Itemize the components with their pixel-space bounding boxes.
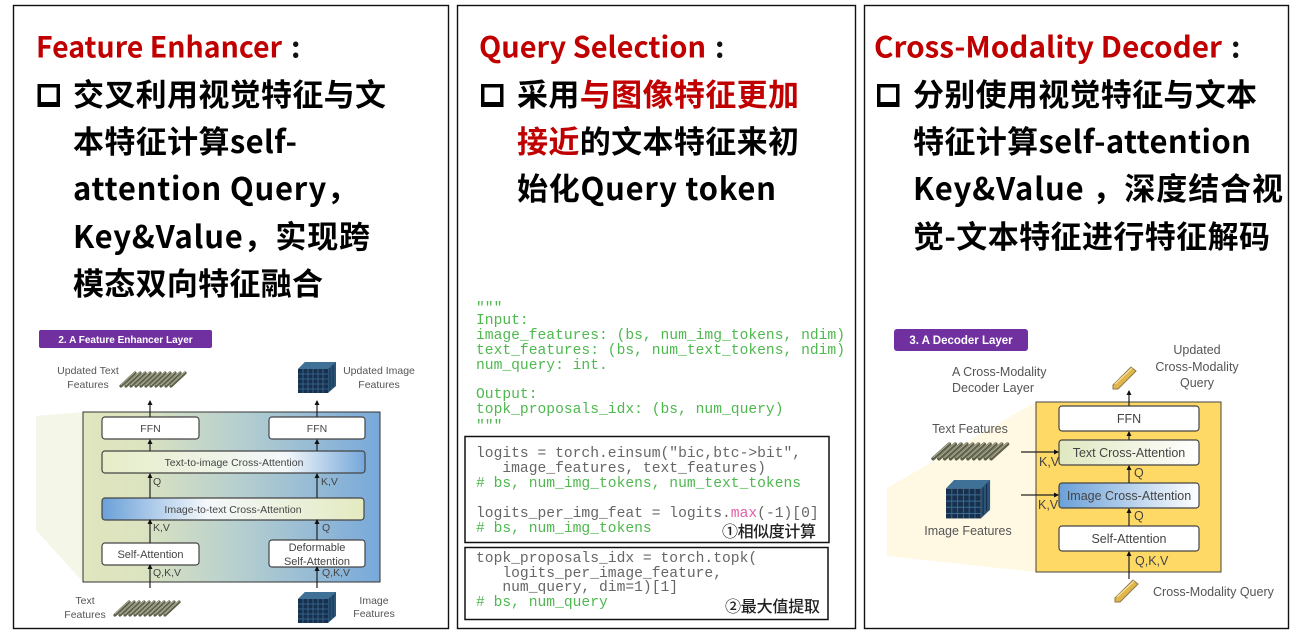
panel: Cross-Modality Decoder xyxy=(864,6,1288,628)
block: self-attention xyxy=(102,543,199,565)
text block: Query Selection description: 接近的文本特征来初 xyxy=(517,117,799,162)
heading: Query Selection: : xyxy=(715,24,724,66)
block: deformable self-attention: Deformable xyxy=(289,542,345,554)
block: text cross-attention xyxy=(1059,440,1199,465)
code box: similarity computation xyxy=(465,436,829,542)
label: updated image features xyxy=(343,365,415,391)
label: text features: Text Features xyxy=(932,422,1008,436)
code: input and output docstring: """ xyxy=(476,419,502,435)
label: cross-modality query: Cross-Modality Query xyxy=(1153,585,1275,599)
icon: image features xyxy=(298,592,336,623)
block: text-to-image cross-attention: Text-to-image Cross-Attention xyxy=(165,457,304,469)
code box: similarity computation: logits = torch.einsum("bic,btc->bit", xyxy=(476,446,801,462)
block: text cross-attention: Text Cross-Attention xyxy=(1073,446,1185,460)
label: updated text features: Updated Text xyxy=(57,365,119,377)
icon: checkbox bullet xyxy=(38,84,60,107)
block: image cross-attention: Image Cross-Attention xyxy=(1067,489,1191,503)
icon: checkbox bullet xyxy=(877,84,900,107)
label: image features: Features xyxy=(353,608,395,620)
icon: input query xyxy=(1115,580,1138,602)
labels: Q K V xyxy=(1038,455,1169,568)
arrows: vertical flow xyxy=(1128,391,1130,579)
arrows: right column xyxy=(316,401,318,588)
code: input and output docstring: num_query: int. xyxy=(476,358,608,374)
text block: Feature Enhancer description: 模态双向特征融合 xyxy=(73,259,323,304)
block: FFN xyxy=(1059,406,1199,431)
layer background xyxy=(1036,402,1221,572)
labels: Q K V: K,V xyxy=(321,476,338,488)
label: text features: Features xyxy=(64,609,106,621)
icon: updated query xyxy=(1113,367,1136,389)
block: self-attention xyxy=(1059,526,1199,551)
arrows: left column xyxy=(149,401,151,588)
diagram: Feature Enhancer Layer xyxy=(36,330,415,623)
labels: Q K V: K,V xyxy=(153,522,170,534)
text block: Query Selection description: 采用与图像特征更加 xyxy=(517,70,799,115)
labels: Q K V xyxy=(153,476,350,579)
block: right FFN: FFN xyxy=(307,423,327,435)
code box: similarity computation: image_features, text_features) xyxy=(476,461,766,477)
code: input and output docstring: image_features: (bs, num_img_tokens, ndim) xyxy=(476,328,845,344)
diagram: Decoder Layer xyxy=(887,329,1275,602)
labels: Q K V: Q xyxy=(1134,466,1144,480)
labels: Q K V: Q xyxy=(1134,509,1144,523)
label: updated cross-modality query: Updated xyxy=(1173,343,1221,357)
label: image features: Image xyxy=(359,595,389,607)
code: input and output docstring: Output: xyxy=(476,387,538,403)
text block: Cross-Modality Decoder description: 觉-文本特征进行特征解码 xyxy=(913,212,1270,257)
text block: Cross-Modality Decoder description: 特征计算self-attention xyxy=(913,117,1251,162)
icon: image features xyxy=(946,480,990,518)
label: text features: Text xyxy=(75,595,95,607)
labels: Q K V: K,V xyxy=(1038,498,1059,512)
icon: text features xyxy=(115,601,179,615)
layer background xyxy=(83,412,380,582)
label: similarity computation: ①相似度计算 xyxy=(722,518,816,542)
text block: Query Selection description xyxy=(517,70,799,209)
text block: Feature Enhancer description: attention Query， xyxy=(73,164,358,209)
code box: similarity computation: logits_per_img_feat = logits.max(-1)[0] xyxy=(476,506,819,522)
code: input and output docstring: """ xyxy=(476,301,502,317)
code box: max value extraction: topk_proposals_idx = torch.topk( xyxy=(476,551,757,567)
block: right FFN xyxy=(269,417,365,439)
code box: max value extraction xyxy=(465,548,828,620)
text block: Cross-Modality Decoder description: Key&Value ，深度结合视 xyxy=(913,164,1283,209)
text block: Feature Enhancer description: 交叉利用视觉特征与文 xyxy=(73,70,386,115)
heading: Query Selection: Query Selection xyxy=(479,24,706,66)
text block: Feature Enhancer description xyxy=(73,70,386,304)
block: self-attention: Self-Attention xyxy=(1091,532,1167,546)
label: cross-modality decoder layer: Decoder Layer xyxy=(952,381,1034,395)
label: updated cross-modality query: Cross-Modality xyxy=(1155,360,1239,374)
text block: Query Selection description: 始化Query token xyxy=(517,164,776,209)
icon: updated image features xyxy=(298,362,336,393)
labels: Q K V: Q,K,V xyxy=(1135,554,1169,568)
icon: updated text features xyxy=(121,372,185,386)
block: image cross-attention xyxy=(1059,483,1199,508)
label: updated text features: Features xyxy=(67,379,109,391)
block: left FFN xyxy=(102,417,199,439)
text block: Feature Enhancer description: Key&Value，实现跨 xyxy=(73,212,370,257)
label: image features: Image Features xyxy=(924,524,1012,538)
block: FFN: FFN xyxy=(1117,412,1141,426)
arrows: feature inputs xyxy=(1021,452,1058,495)
labels: Q K V: Q,K,V xyxy=(322,567,350,579)
zoom trapezoid xyxy=(36,412,83,582)
block: left FFN: FFN xyxy=(140,423,161,435)
labels: Q K V: Q xyxy=(153,476,161,488)
code box: max value extraction: num_query, dim=1)[1] xyxy=(476,580,678,596)
text block: Cross-Modality Decoder description: 分别使用视觉特征与文本 xyxy=(913,70,1257,115)
text block: Cross-Modality Decoder description xyxy=(913,70,1283,257)
heading: Feature Enhancer: Feature Enhancer xyxy=(36,24,282,66)
heading: Cross-Modality Decoder: : xyxy=(1231,24,1240,66)
block: deformable self-attention: Self-Attention xyxy=(284,556,350,568)
label: cross-modality decoder layer: A Cross-Modality xyxy=(952,365,1047,379)
labels: Q K V: Q xyxy=(322,522,330,534)
panel: Feature Enhancer xyxy=(14,6,448,628)
label: cross-modality decoder layer xyxy=(952,365,1047,395)
label: updated image features: Features xyxy=(358,379,400,391)
block: self-attention: Self-Attention xyxy=(117,549,184,561)
label: image features xyxy=(353,595,395,620)
icon: checkbox bullet xyxy=(481,84,504,107)
labels: Q K V: Q,K,V xyxy=(153,567,181,579)
label: layer title: 3. A Decoder Layer xyxy=(909,335,1013,347)
heading: Cross-Modality Decoder: Cross-Modality Decoder xyxy=(874,24,1222,66)
label: updated cross-modality query xyxy=(1155,343,1239,390)
panel: Query Selection xyxy=(458,6,856,628)
code: input and output docstring: topk_proposals_idx: (bs, num_query) xyxy=(476,402,784,418)
label: layer title xyxy=(894,329,1028,351)
label: layer title: 2. A Feature Enhancer Layer xyxy=(58,335,193,346)
block: image-to-text cross-attention: Image-to-text Cross-Attention xyxy=(164,504,302,516)
label: updated text features xyxy=(57,365,119,391)
code: input and output docstring: text_features: (bs, num_text_tokens, ndim) xyxy=(476,343,845,359)
block: text-to-image cross-attention xyxy=(102,451,365,473)
label: updated image features: Updated Image xyxy=(343,365,415,377)
code: input and output docstring xyxy=(476,301,845,435)
block: image-to-text cross-attention xyxy=(102,498,364,520)
block: deformable self-attention xyxy=(269,540,365,568)
code: input and output docstring: Input: xyxy=(476,313,529,329)
heading: Feature Enhancer: : xyxy=(291,24,300,66)
code box: max value extraction: logits_per_image_feature, xyxy=(476,566,722,582)
label: max value extraction: ②最大值提取 xyxy=(725,593,820,617)
label: text features xyxy=(64,595,106,621)
label: updated cross-modality query: Query xyxy=(1180,376,1215,390)
code box: similarity computation: # bs, num_img_tokens xyxy=(476,521,652,537)
text block: Feature Enhancer description: 本特征计算self- xyxy=(73,117,297,162)
code box: max value extraction: # bs, num_query xyxy=(476,595,608,611)
label: layer title xyxy=(39,330,212,348)
code box: similarity computation: # bs, num_img_tokens, num_text_tokens xyxy=(476,476,801,492)
zoom trapezoid xyxy=(887,402,1036,572)
labels: Q K V: K,V xyxy=(1039,455,1060,469)
icon: text features xyxy=(933,443,1007,459)
